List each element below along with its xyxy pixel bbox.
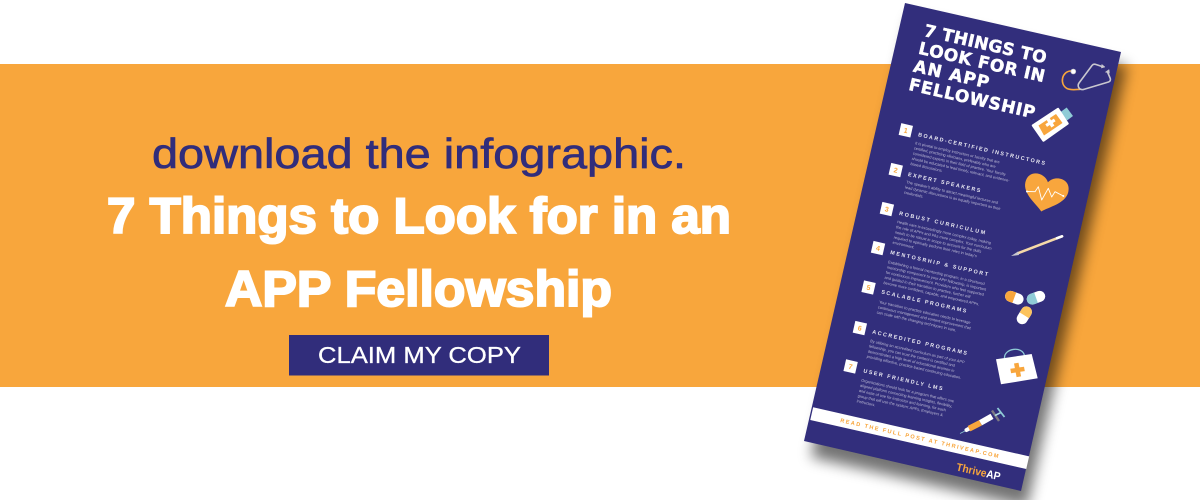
item 5: can scale with the changing techniques in care. <box>876 310 957 333</box>
icon: syringe <box>960 408 1004 434</box>
icon: stethoscope <box>1062 64 1110 90</box>
item 4: MENTOSRHIP & SUPPORT <box>890 250 989 278</box>
item 7: Instructors. <box>856 398 876 407</box>
item 2: EXPERT SPEAKERS <box>907 172 981 194</box>
item 7: 7 <box>848 364 853 371</box>
card title <box>907 21 1051 124</box>
footer band: READ THE FULL POST AT THRIVEAP.COM <box>840 418 999 460</box>
card title: FELLOWSHIP <box>907 75 1037 123</box>
item 4: Establishing a formal mentorship program, in a structured <box>888 259 985 286</box>
item 6: 6 <box>857 325 862 333</box>
item 1: should be educated to lead timely, relevant, and evidence- <box>911 156 1011 183</box>
item 3: ROBUST CURRICULUM <box>898 211 986 236</box>
subheading: download the infographic. <box>152 130 686 177</box>
item 2: The speaker's ability to attract meaningful lectures and <box>906 179 999 205</box>
card body <box>804 3 1121 491</box>
icon: medicine bottle <box>1033 108 1073 140</box>
infographic card <box>804 3 1121 491</box>
item 4 <box>864 241 992 308</box>
title line 1: 7 Things to Look for in an <box>107 188 731 244</box>
item 6: providing effective, practice-based continuing education. <box>866 354 962 380</box>
item 1: based discussions. <box>910 161 943 173</box>
item 6 <box>848 321 969 380</box>
item 3: 3 <box>884 206 889 214</box>
title line 2: APP Fellowship <box>225 261 612 317</box>
item 3: the role of APPs and PAs more complex. Your curriculum <box>896 224 992 251</box>
item 2: lead dynamic discussions is as equally important as their <box>905 184 1002 211</box>
item 6: ACCREDITED PROGRAMS <box>872 329 968 357</box>
card drop shadow <box>811 17 1127 500</box>
item 7: aligned platform connecting learning insights, flexibility, <box>860 383 953 409</box>
item 4: for continuous improvement. Providers who feel supported <box>885 270 985 297</box>
item 5: Your transition to practice education needs to leverage <box>879 299 971 325</box>
item 3: needs to be robust in scope to account for the skills <box>894 229 982 254</box>
item 1: BOARD-CERTIFIED INSTRUCTORS <box>917 132 1046 167</box>
item 5 <box>857 280 977 336</box>
item 2: 2 <box>893 167 898 175</box>
item 6: fellowship, you can trust the content is certified and <box>869 343 956 368</box>
item 1: It is pivotal to employ instructors or faculty that are <box>915 140 1000 164</box>
item 7: group that will use the system: APPs, Employers & <box>857 393 944 417</box>
item 4: mentorship component to your APP fellowship, is important <box>887 264 988 292</box>
item 1: certified, practicing clinicians, preferably who are <box>914 145 996 169</box>
item 3 <box>874 202 996 266</box>
card title: 7 THINGS TO <box>922 21 1048 68</box>
item 5: continuous management and content improvement that <box>877 304 972 331</box>
icon: heart with pulse <box>1020 171 1071 216</box>
icon: pills <box>1003 289 1047 326</box>
icon: medical bag <box>996 349 1038 384</box>
item 7: and ease of use for instructor and learning, for each <box>858 388 946 413</box>
item 6: By utilizing an accredited curriculum as part of your APP <box>870 338 966 365</box>
item 6: demonstrates a high level of educational acumen in <box>867 349 955 373</box>
item 4: 4 <box>875 245 881 253</box>
item 5: 5 <box>866 285 871 292</box>
item 7: Organizations should look for a program that offers one <box>861 378 955 404</box>
button: claim my copy: CLAIM MY COPY <box>318 342 521 368</box>
item 7 <box>837 359 958 424</box>
card content, rotated <box>806 16 1118 488</box>
logo: ThriveAP <box>955 462 1002 483</box>
card title: AN APP <box>911 57 991 93</box>
item 3: Health care is exceedingly more complex today, making <box>897 219 992 245</box>
orange banner <box>0 64 1200 387</box>
card title: LOOK FOR IN <box>917 39 1047 87</box>
item 2: credentials. <box>904 190 924 199</box>
item 4: become more confident, capable, and empowered APPs. <box>883 280 980 307</box>
item 1: 1 <box>903 127 908 135</box>
button: claim my copy <box>289 335 549 376</box>
item 4: and guided in their transition to practice, further will <box>884 275 971 299</box>
item 1 <box>892 123 1047 195</box>
footer band <box>810 407 1029 469</box>
item 1: considered experts in their field of practice. Your faculty <box>912 151 1006 177</box>
item 3: required to optimally perform their roles in today's <box>893 235 977 258</box>
item 7: USER FRIENDLY LMS <box>863 369 943 392</box>
item 3: environment. <box>892 240 915 250</box>
icon: pencil <box>1011 236 1062 256</box>
item 2 <box>885 163 1006 216</box>
item 5: SCALABLE PROGRAMS <box>881 290 967 315</box>
